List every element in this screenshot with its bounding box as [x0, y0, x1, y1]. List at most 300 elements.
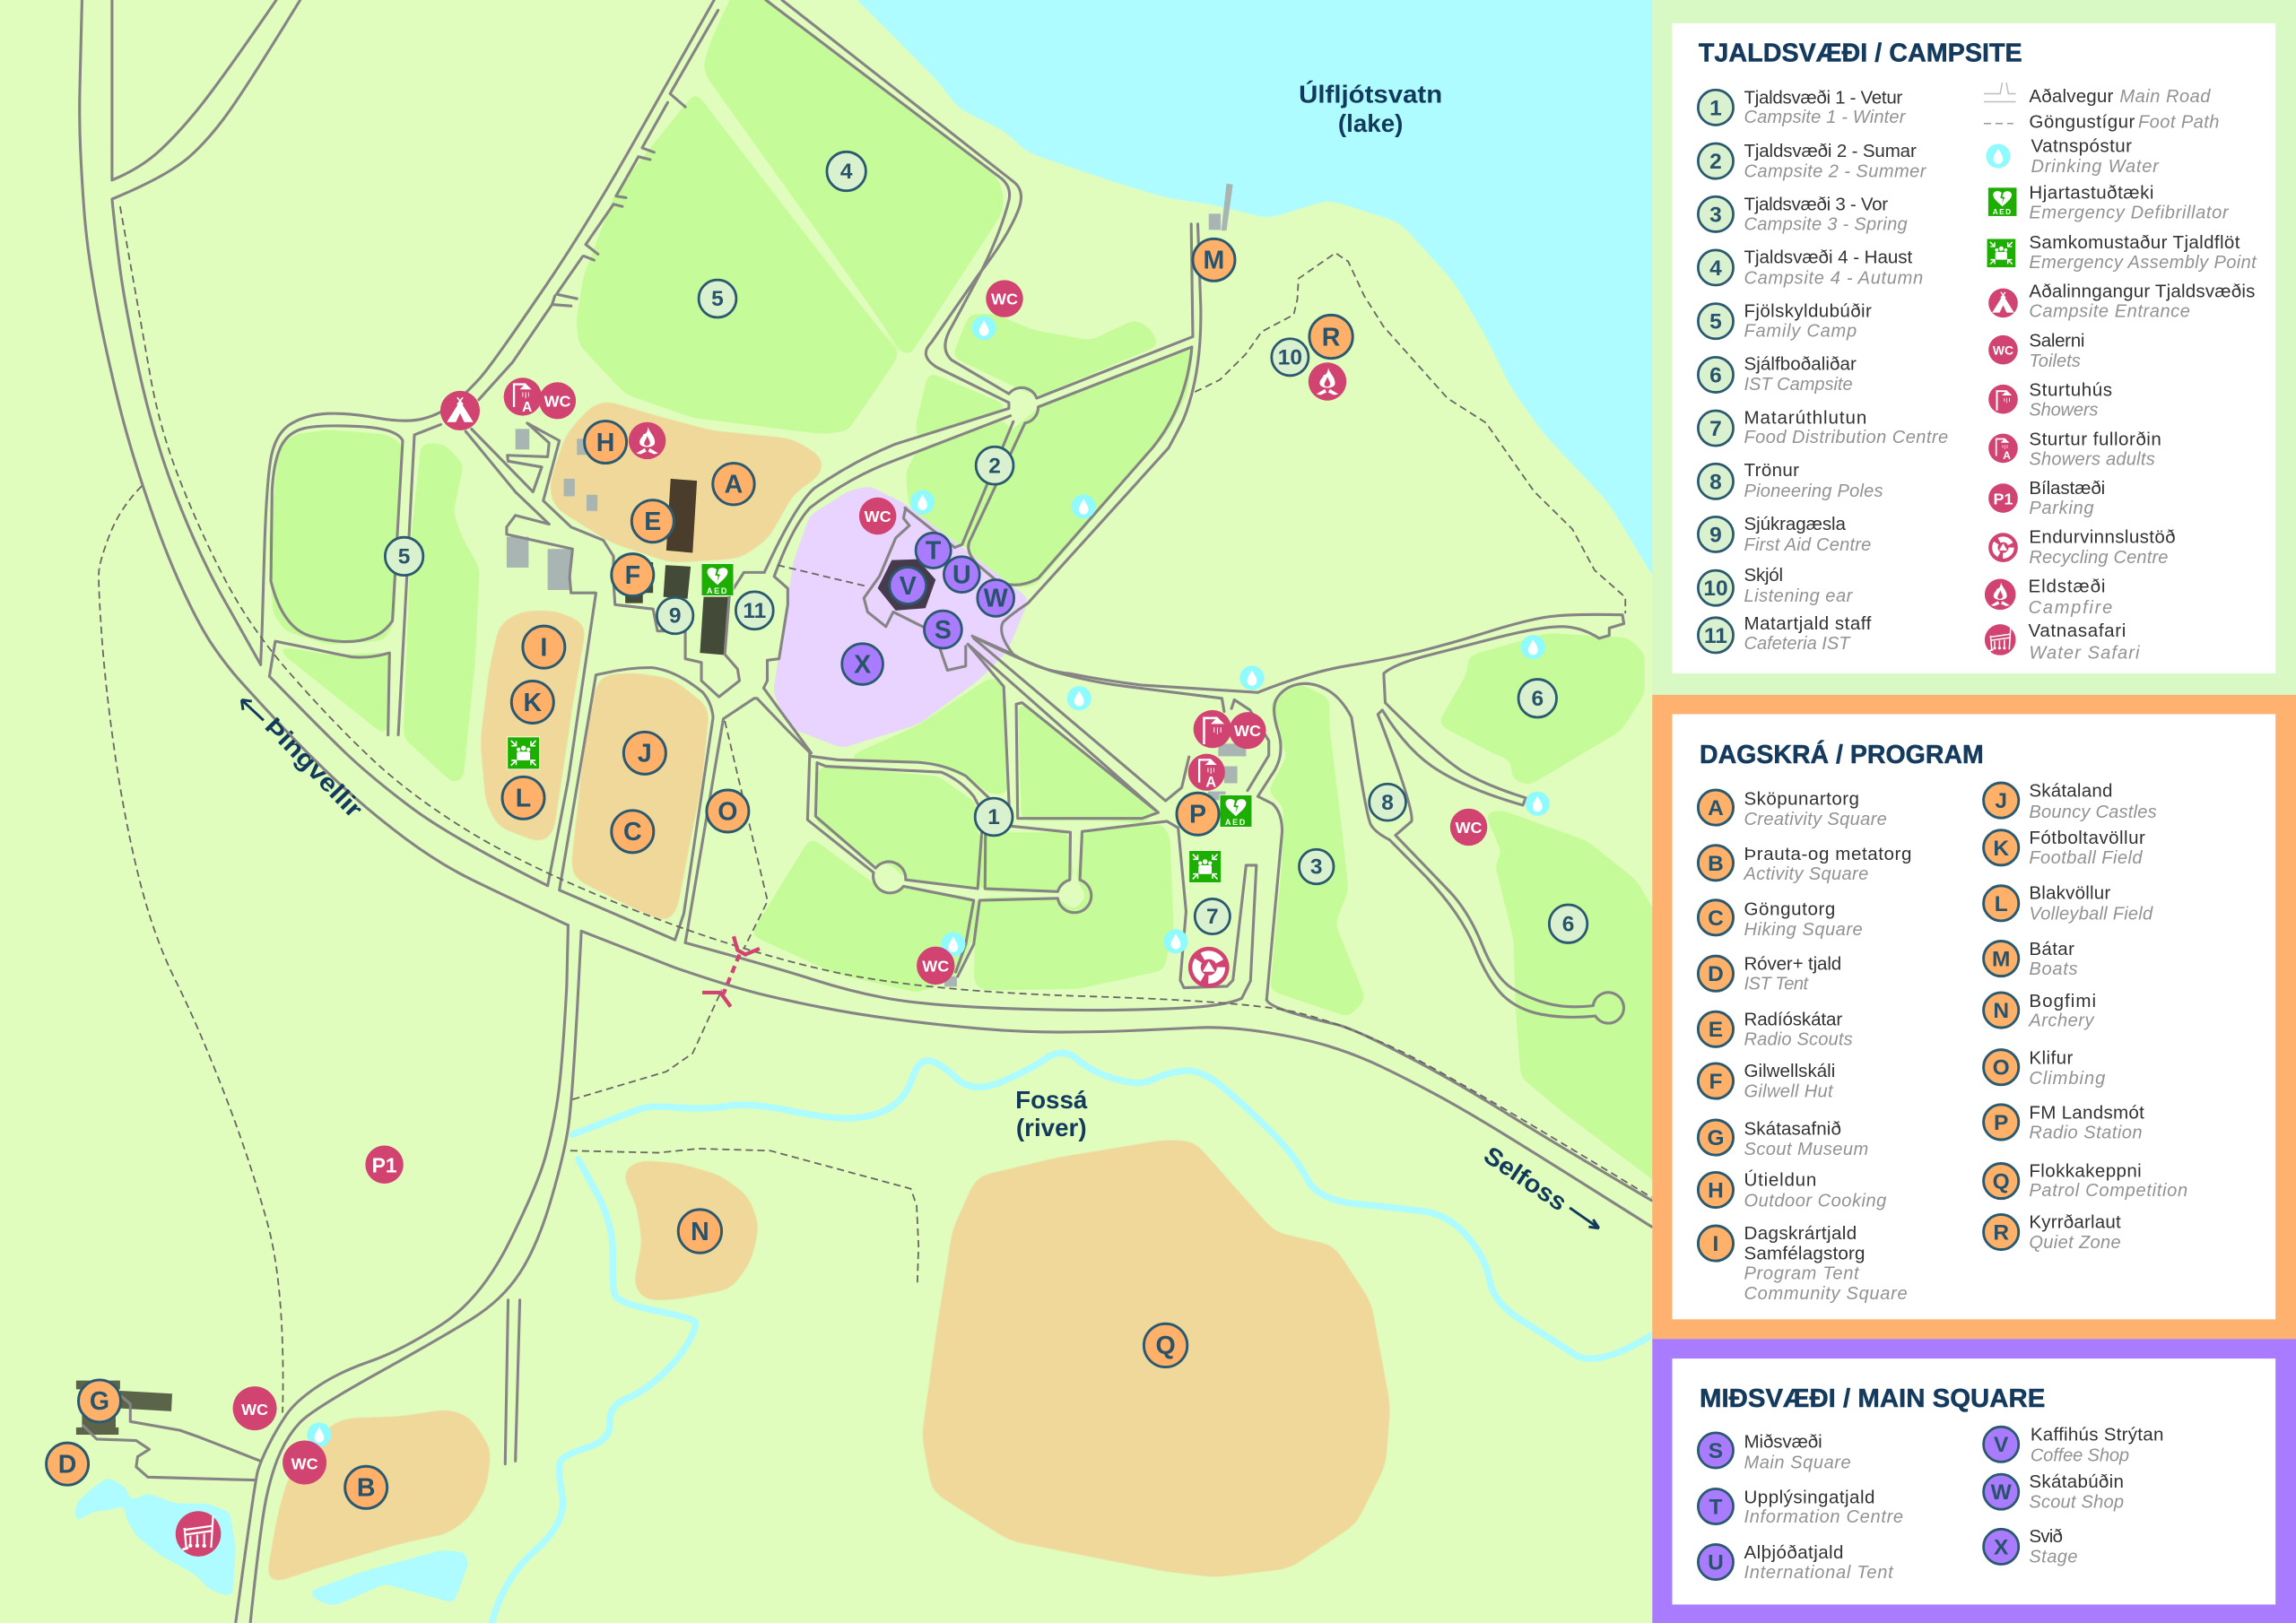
marker: K: K [523, 689, 542, 717]
marker: G: G [90, 1387, 109, 1416]
row 1: Tjaldsvæði 1 - Vetur [1744, 87, 1902, 108]
row D: IST Tent [1744, 975, 1810, 994]
row C [1698, 898, 1863, 940]
marker: R: R [1322, 323, 1341, 352]
row 7 [1698, 408, 1948, 447]
row M: M [1992, 948, 2010, 972]
row I: Samfélagstorg [1744, 1244, 1866, 1264]
label: river [1015, 1086, 1088, 1141]
row L [1984, 882, 2153, 924]
row A [1698, 788, 1887, 829]
marker: 6 south: 6 [1562, 912, 1574, 936]
marker: H [585, 421, 627, 464]
key: showers adults [1988, 429, 2161, 469]
marker: E [631, 500, 674, 542]
row T [1698, 1487, 1903, 1527]
marker: L [502, 777, 544, 819]
marker: campfire quiet zone [1309, 362, 1346, 401]
main roads [80, 0, 1652, 1622]
key: toilets: Toilets [2029, 352, 2081, 371]
row 3: 3 [1709, 203, 1722, 227]
row J: Skátaland [2029, 781, 2112, 802]
campsite gate barrier [702, 936, 760, 1007]
key: recycling: Endurvinnslustöð [2029, 527, 2176, 548]
program markers A-R [47, 239, 1352, 1508]
marker: B [345, 1466, 387, 1508]
program areas [268, 403, 1388, 1581]
row O: Climbing [2029, 1069, 2105, 1089]
row 5: Family Camp [1744, 322, 1857, 342]
river Fossá [492, 1053, 1652, 1622]
marker: 5 west: 5 [398, 545, 410, 569]
row 3 [1698, 194, 1908, 235]
marker: 6 north: 6 [1531, 687, 1544, 711]
campsite roads west [261, 0, 811, 753]
marker: C [612, 811, 654, 853]
row T: Upplýsingatjald [1744, 1487, 1874, 1507]
marker: AED main: AED [707, 586, 728, 595]
marker: R [1309, 315, 1352, 359]
row 8: Trönur [1744, 460, 1799, 481]
row D: D [1708, 962, 1724, 986]
row I: Program Tent [1744, 1263, 1860, 1283]
key: assembly point [1987, 232, 2257, 273]
marker: 1 [975, 798, 1013, 836]
row R [1984, 1211, 2121, 1253]
marker: toilets: WC [865, 508, 891, 525]
label: road to Selfoss with arrow: Selfoss [1479, 1141, 1572, 1216]
marker: AED south [1220, 795, 1252, 827]
marker: O: O [718, 797, 738, 826]
key: recycling [1988, 527, 2176, 568]
row A: Creativity Square [1744, 810, 1887, 829]
marker: N: N [691, 1218, 709, 1246]
row 10: 10 [1703, 577, 1728, 601]
row U: International Tent [1744, 1563, 1894, 1583]
marker: T: T [926, 537, 942, 566]
heading: main square: MIÐSVÆÐI / MAIN SQUARE [1700, 1384, 2045, 1413]
row E: Radíóskátar [1744, 1009, 1842, 1029]
marker: Q [1144, 1324, 1187, 1367]
row 5 [1698, 301, 1872, 342]
marker: 3: 3 [1310, 855, 1323, 880]
row H: Outdoor Cooking [1744, 1191, 1886, 1211]
marker: toilets: WC [1456, 819, 1483, 837]
marker: G [79, 1380, 121, 1422]
marker: 2 [976, 447, 1013, 484]
marker: P [1177, 793, 1219, 835]
key: assembly point: Emergency Assembly Point [2029, 253, 2257, 273]
row 3: Tjaldsvæði 3 - Vor [1744, 194, 1888, 214]
row G [1698, 1118, 1868, 1159]
marker: N [678, 1210, 722, 1253]
marker: 3 [1299, 849, 1334, 884]
marker: 10: 10 [1278, 346, 1302, 370]
lake Úlfljótsvatn [814, 0, 1699, 652]
row 11: Cafeteria IST [1744, 634, 1851, 654]
key: parking: Parking [2029, 499, 2094, 518]
key: showers adults: Showers adults [2029, 449, 2155, 469]
key: drinking water: Drinking Water [2031, 157, 2160, 177]
marker: parking P1 [365, 1146, 404, 1184]
row K: Football Field [2029, 848, 2143, 868]
row 8: 8 [1709, 470, 1722, 494]
marker: S [925, 611, 961, 648]
marker: M [1193, 239, 1235, 281]
row E: E [1709, 1018, 1723, 1042]
heading: program: DAGSKRÁ / PROGRAM [1700, 739, 1984, 769]
row M [1984, 939, 2078, 979]
row K: Fótboltavöllur [2029, 828, 2145, 848]
key: water safari: Vatnasafari [2029, 621, 2126, 641]
key: campfire: Campfire [2029, 598, 2112, 618]
row D [1698, 954, 1841, 994]
marker: toilets: WC [991, 291, 1018, 308]
campsite fields [271, 0, 1684, 1201]
row 9: First Aid Centre [1744, 535, 1871, 555]
row 8: Pioneering Poles [1744, 482, 1883, 501]
key: foot path [1984, 112, 2219, 133]
marker: showers adults south [1188, 754, 1225, 791]
key: drinking water: Vatnspóstur [2031, 136, 2132, 157]
row X: X [1994, 1535, 2009, 1559]
row 10: Skjól [1744, 565, 1783, 586]
row B: Activity Square [1743, 864, 1868, 884]
key: toilets: WC [1993, 343, 2013, 357]
row V: V [1994, 1433, 2009, 1457]
row 9: Sjúkragæsla [1744, 514, 1847, 534]
row 11: 11 [1704, 624, 1727, 648]
marker: 2: 2 [988, 454, 1001, 478]
row V [1984, 1425, 2163, 1465]
row I: Community Square [1744, 1284, 1908, 1304]
row 7: 7 [1709, 417, 1722, 441]
marker: 7: 7 [1206, 905, 1219, 929]
row 5: 5 [1709, 310, 1722, 334]
marker: U: U [952, 560, 971, 589]
marker: drinking water points [307, 316, 1550, 1447]
row W: Scout Shop [2029, 1493, 2124, 1513]
marker: water safari [176, 1511, 221, 1557]
key: campsite entrance: Campsite Entrance [2029, 302, 2190, 322]
label: river: (river) [1016, 1114, 1087, 1141]
marker: assembly point west [508, 737, 540, 769]
key: main road: Main Road [2119, 87, 2211, 107]
row S: Miðsvæði [1744, 1432, 1822, 1453]
row B: Þrauta-og metatorg [1744, 844, 1911, 864]
key: showers: Sturtuhús [2029, 379, 2112, 400]
row F [1698, 1061, 1835, 1102]
marker: 4: 4 [840, 160, 853, 184]
row J [1984, 781, 2157, 822]
row H [1698, 1169, 1886, 1211]
row 10 [1698, 565, 1854, 606]
main square markers [842, 533, 1014, 684]
row 1 [1698, 87, 1907, 127]
row C: Göngutorg [1744, 898, 1835, 919]
row M: Boats [2029, 959, 2078, 979]
row J: Bouncy Castles [2029, 803, 2157, 822]
marker: toilets: WC [291, 1454, 318, 1472]
row L: Blakvöllur [2029, 882, 2110, 903]
key: toilets [1988, 330, 2084, 371]
marker: S: S [935, 616, 952, 645]
row 5: Fjölskyldubúðir [1744, 301, 1872, 322]
marker: H: H [596, 429, 614, 457]
marker: J: J [638, 740, 652, 768]
marker: V: V [900, 572, 917, 601]
row P [1984, 1102, 2144, 1142]
label: road to Þingvellir with arrow [241, 699, 369, 823]
campsite number markers [385, 152, 1587, 942]
marker: 6 north [1518, 680, 1557, 717]
marker: I [523, 626, 565, 668]
row 9: 9 [1709, 523, 1722, 547]
row N: Bogfimi [2029, 991, 2096, 1011]
marker: D: D [58, 1450, 76, 1479]
row J: J [1995, 789, 2007, 813]
row O [1984, 1047, 2105, 1089]
campsite roads centre [764, 0, 1269, 891]
row 1: 1 [1709, 96, 1722, 120]
row M: Bátar [2029, 939, 2074, 959]
marker: E: E [644, 508, 661, 536]
key: parking: Bílastæði [2029, 478, 2105, 499]
row X [1984, 1526, 2078, 1567]
row L: Volleyball Field [2029, 904, 2153, 924]
marker: AED main [701, 564, 734, 595]
row K [1984, 828, 2145, 868]
row I [1698, 1223, 1908, 1304]
key: campsite entrance [1988, 282, 2255, 322]
marker: assembly point east [1189, 851, 1222, 882]
row R: Quiet Zone [2029, 1233, 2121, 1253]
row B: B [1708, 852, 1724, 876]
key: recycling: Recycling Centre [2029, 548, 2168, 568]
row 6: IST Campsite [1744, 375, 1853, 395]
row C: C [1708, 907, 1724, 931]
row U [1698, 1542, 1894, 1583]
marker: parking P1: P1 [372, 1154, 397, 1177]
key: parking [1988, 478, 2105, 518]
row G: Scout Museum [1744, 1140, 1868, 1159]
key: main road [1984, 82, 2211, 107]
marker: AED south: AED [1225, 818, 1247, 827]
row O: Klifur [2029, 1047, 2073, 1068]
key: showers: Showers [2029, 401, 2098, 421]
marker: T [916, 533, 951, 568]
row C: Hiking Square [1744, 920, 1863, 940]
marker: toilets [233, 280, 1487, 1485]
row W: W [1991, 1480, 2013, 1505]
row H: H [1708, 1179, 1724, 1203]
row 6: Sjálfboðaliðar [1744, 353, 1857, 374]
marker: U [944, 557, 979, 593]
marker: recycling centre [1188, 947, 1230, 988]
row N [1984, 991, 2096, 1030]
marker: F: F [625, 561, 640, 590]
row P: FM Landsmót [2029, 1102, 2144, 1123]
marker: V [890, 568, 926, 603]
marker: 11: 11 [743, 599, 766, 623]
marker: 10 [1272, 339, 1309, 376]
marker: J [623, 732, 665, 774]
row X: Stage [2029, 1548, 2078, 1567]
marker: K [511, 681, 553, 724]
row G: G [1707, 1126, 1725, 1150]
row 11 [1698, 613, 1872, 654]
row F: Gilwellskáli [1744, 1061, 1835, 1081]
row W [1984, 1471, 2124, 1513]
marker: I: I [540, 633, 547, 662]
row O: O [1993, 1056, 2010, 1081]
key: toilets: Salerni [2029, 330, 2084, 351]
row I: Dagskrártjald [1744, 1223, 1857, 1244]
heading: campsite: TJALDSVÆÐI / CAMPSITE [1699, 39, 2022, 68]
row F: F [1709, 1070, 1723, 1094]
label: lake: (lake) [1338, 109, 1403, 137]
key: foot path: Foot Path [2138, 113, 2219, 133]
marker: A: A [725, 471, 743, 499]
row I: I [1713, 1232, 1718, 1256]
row N: Archery [2028, 1011, 2095, 1030]
row U: U [1708, 1551, 1724, 1575]
label: lake [1299, 80, 1442, 137]
marker: X: X [854, 650, 871, 679]
marker: X [842, 644, 883, 684]
marker: P: P [1189, 801, 1206, 829]
map background [0, 0, 1655, 1623]
marker: Q: Q [1155, 1332, 1176, 1360]
marker: A [713, 464, 754, 505]
row P: Radio Station [2029, 1123, 2143, 1142]
row Q [1984, 1160, 2187, 1201]
marker: M: M [1204, 247, 1224, 275]
marker: C: C [623, 818, 642, 846]
row 9 [1698, 514, 1871, 555]
row 4: 4 [1709, 256, 1722, 281]
marker: 1: 1 [987, 805, 1000, 829]
key: defibrillator: AED [1993, 208, 2013, 216]
key: water safari: Water Safari [2029, 644, 2140, 664]
row V: Coffee Shop [2031, 1445, 2129, 1465]
row H: Útieldun [1744, 1169, 1816, 1190]
row T: T [1709, 1495, 1723, 1519]
marker: F [612, 554, 654, 596]
row E: Radio Scouts [1744, 1030, 1853, 1050]
row X: Svið [2029, 1526, 2063, 1547]
row U: Alþjóðatjald [1744, 1542, 1844, 1563]
main square area [773, 486, 1030, 748]
marker: 4 [827, 152, 865, 191]
row 10: Listening ear [1744, 586, 1854, 606]
row 7: Food Distribution Centre [1744, 428, 1948, 447]
label: road to Þingvellir with arrow: Þingvellir [260, 712, 369, 823]
marker: campfire [629, 422, 665, 459]
row K: K [1993, 837, 2009, 861]
row 1: Campsite 1 - Winter [1744, 108, 1907, 127]
foot paths [99, 206, 1652, 1413]
panel: main square legend [1652, 1339, 2296, 1623]
panel: program legend [1652, 695, 2296, 1339]
marker: 8 [1370, 784, 1406, 820]
label: river: Fossá [1015, 1086, 1088, 1114]
row W: Skátabúðin [2029, 1471, 2124, 1492]
row Q: Flokkakeppni [2029, 1160, 2142, 1181]
campsite roads east [1257, 614, 1624, 1023]
row 2: 2 [1709, 150, 1722, 174]
key: water safari [1985, 621, 2140, 664]
marker: 6 south [1549, 905, 1587, 942]
buildings [76, 184, 1246, 1435]
panel: campsite legend [1652, 0, 2296, 696]
marker: toilets: WC [1234, 722, 1261, 740]
marker: 9: 9 [669, 604, 681, 629]
marker: O [707, 790, 749, 832]
row 8 [1698, 460, 1883, 501]
key: campfire [1985, 577, 2112, 618]
row S [1698, 1432, 1851, 1473]
key: campfire: Eldstæði [2029, 577, 2105, 597]
row G: Skátasafnið [1744, 1118, 1841, 1139]
key: defibrillator: Hjartastuðtæki [2029, 182, 2153, 203]
marker: 7 [1195, 898, 1230, 934]
row 3: Campsite 3 - Spring [1744, 215, 1908, 235]
ponds [74, 1477, 468, 1606]
marker: W [978, 580, 1014, 616]
row 7: Matarúthlutun [1744, 408, 1866, 429]
marker: showers adults south: A [1205, 775, 1216, 791]
label: road to Selfoss with arrow [1479, 1141, 1599, 1228]
key: drinking water [1986, 136, 2160, 177]
key: main road: Aðalvegur [2029, 86, 2114, 107]
marker: showers adults north [504, 378, 542, 416]
row T: Information Centre [1744, 1507, 1903, 1527]
row 4: Campsite 4 - Autumn [1744, 268, 1923, 288]
marker: L: L [516, 785, 531, 813]
marker: toilets: WC [544, 392, 571, 410]
row 6: 6 [1709, 363, 1722, 387]
row P: P [1994, 1111, 2008, 1135]
row B [1698, 844, 1911, 884]
key: showers adults: A [2003, 449, 2011, 462]
row E [1698, 1009, 1853, 1050]
row 4 [1698, 247, 1923, 288]
row A: Sköpunartorg [1744, 788, 1859, 809]
label: lake: Úlfljótsvatn [1299, 80, 1442, 108]
marker: 9 [657, 597, 693, 634]
row 11: Matartjald staff [1744, 613, 1872, 634]
marker: toilets: WC [922, 957, 949, 975]
row R: R [1993, 1221, 2009, 1245]
row 2: Tjaldsvæði 2 - Sumar [1744, 141, 1917, 161]
row 4: Tjaldsvæði 4 - Haust [1744, 247, 1913, 268]
key: showers [1988, 379, 2112, 421]
marker: D [47, 1443, 89, 1485]
key: assembly point: Samkomustaður Tjaldflöt [2029, 232, 2240, 253]
row 6 [1698, 353, 1857, 395]
marker: showers [1194, 710, 1231, 748]
marker: B: B [357, 1474, 375, 1503]
row V: Kaffihús Strýtan [2031, 1425, 2163, 1445]
marker: 5 north [699, 280, 736, 317]
marker: toilets: WC [241, 1401, 268, 1419]
row 2 [1698, 141, 1927, 182]
key: foot path: Göngustígur [2029, 112, 2135, 133]
row F: Gilwell Hut [1744, 1082, 1834, 1102]
row N: N [1993, 999, 2009, 1023]
row A: A [1708, 796, 1724, 820]
